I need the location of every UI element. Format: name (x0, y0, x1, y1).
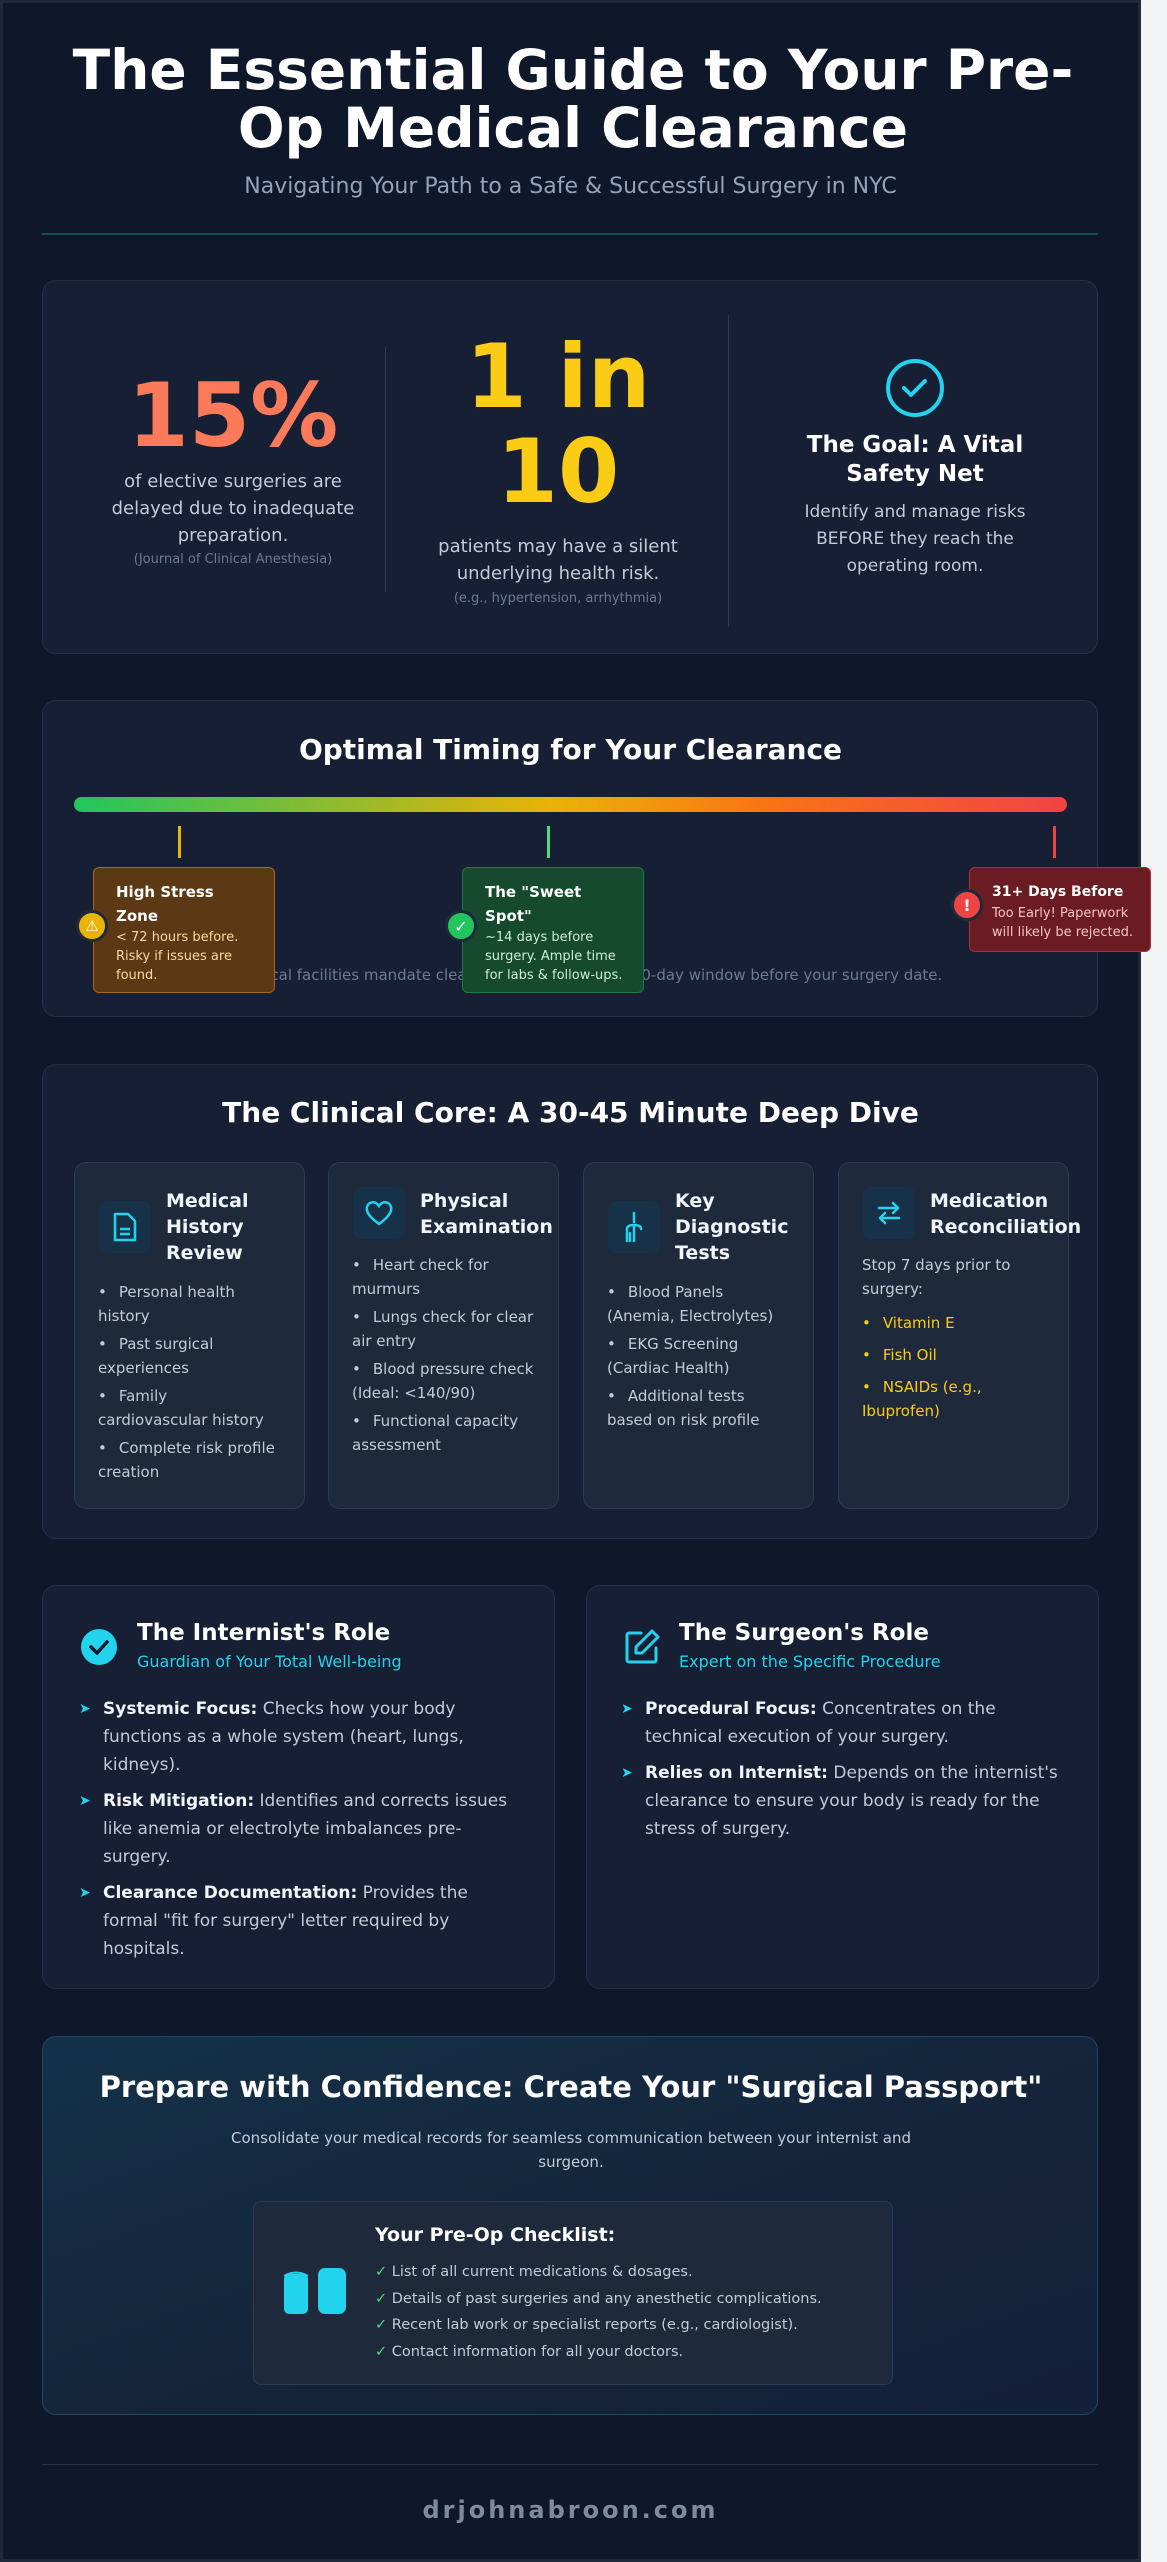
card: medication: surgery: (862, 1280, 923, 1298)
subtitle: Navigating Your Path to a Safe & Successful Surgery in NYC (244, 174, 897, 199)
card: physical exam: Lungs check for clear air entry (352, 1308, 533, 1350)
card: high stress: found. (116, 968, 157, 983)
card: diagnostic tests (583, 1162, 814, 1509)
title: The Essential Guide to Your Pre- (73, 38, 1073, 102)
card: medical history: Personal health history (98, 1283, 235, 1325)
card: physical exam: Physical (420, 1190, 508, 1212)
list: surgeon (622, 1699, 1058, 1839)
card: diagnostic tests: Diagnostic (675, 1216, 788, 1238)
card: too early: 31+ Days Before (992, 884, 1123, 900)
title (72, 38, 1073, 160)
card: sweet spot: ~14 days before (485, 930, 593, 945)
stat: 15%: delayed due to inadequate (112, 498, 354, 519)
card: diagnostic tests: Blood Panels (628, 1283, 723, 1301)
card: medical history: Medical (166, 1190, 249, 1212)
panel: internist role: The Internist's Role (137, 1620, 390, 1646)
goal block: BEFORE they reach the (816, 529, 1014, 549)
checklist box: Your Pre-Op Checklist: (375, 2224, 615, 2246)
icon: warning: ⚠ (85, 917, 99, 935)
panel: surgeon role: Expert on the Specific Procedure (679, 1652, 941, 1671)
checklist box: ✓ List of all current medications & dosages. (375, 2264, 693, 2280)
card: diagnostic tests: Additional tests based on risk profile (607, 1387, 759, 1429)
goal block: Identify and manage risks (804, 502, 1026, 522)
heading: timing: Optimal Timing for Your Clearance (299, 733, 842, 766)
list: surgeon: Relies on Internist: Depends on the internist's clearance to ensure your body is ready for the stress of surgery. (645, 1763, 1058, 1839)
timeline bar (74, 797, 1067, 812)
card: diagnostic tests: EKG Screening (Cardiac Health) (607, 1335, 738, 1377)
panel: internist role: Guardian of Your Total Well-being (137, 1652, 402, 1671)
checklist box: ✓ Recent lab work or specialist reports (e.g., cardiologist). (375, 2317, 798, 2333)
footer: drjohnabroon.com (422, 2496, 718, 2524)
icon: badge check (81, 1629, 117, 1665)
icon: alert (951, 889, 983, 921)
card: physical exam: Examination (420, 1216, 553, 1238)
icon: warning (76, 910, 108, 942)
checklist box: ✓ Details of past surgeries and any anesthetic complications. (375, 2290, 822, 2306)
panel: surgical passport: Prepare with Confidence: Create Your "Surgical Passport" (100, 2070, 1042, 2104)
card: sweet spot: for labs & follow-ups. (485, 968, 622, 983)
card: medication: Reconciliation (930, 1216, 1081, 1238)
card: high stress: < 72 hours before. (116, 930, 238, 945)
card: physical exam: Heart check for murmurs (352, 1256, 489, 1298)
stat: 15% (112, 364, 354, 567)
stat: 1 in 10: 10 (497, 420, 619, 523)
icon: folders (284, 2268, 346, 2314)
checklist box: ✓ Contact information for all your doctors. (375, 2344, 683, 2360)
stat: 1 in 10 (438, 325, 678, 606)
card: medical history: History (166, 1216, 244, 1238)
list: surgeon: Procedural Focus: Concentrates on the technical execution of your surgery. (645, 1699, 996, 1747)
card: high stress (93, 867, 275, 993)
card: too early: will likely be rejected. (992, 925, 1133, 940)
goal block: The Goal: A Vital (807, 432, 1023, 458)
footnote: NYC surgical facilities mandate clearance occurs within a 30-day window before your surgery date. (199, 966, 942, 984)
stat: 15%: of elective surgeries are (124, 471, 342, 492)
title: Op Medical Clearance (238, 96, 908, 160)
goal block: Safety Net (846, 461, 984, 487)
card: medical history: Complete risk profile creation (98, 1439, 275, 1481)
panel: surgeon role (586, 1585, 1099, 1989)
card: diagnostic tests: Tests (675, 1242, 730, 1264)
heading: clinical core: The Clinical Core: A 30-45 Minute Deep Dive (222, 1096, 919, 1129)
card: medication: NSAIDs (e.g., Ibuprofen) (862, 1378, 982, 1420)
card: physical exam: Functional capacity assessment (352, 1412, 518, 1454)
stat: 1 in 10: (e.g., hypertension, arrhythmia) (454, 591, 662, 606)
card: too early: Too Early! Paperwork (992, 906, 1128, 921)
card: sweet spot: surgery. Ample time (485, 949, 616, 964)
panel: clinical core (42, 1064, 1098, 1539)
icon: check circle (886, 359, 944, 417)
panel: timing (42, 700, 1098, 1017)
icon: check: ✓ (454, 916, 468, 936)
card: medication (838, 1162, 1069, 1509)
card: physical exam (328, 1162, 559, 1509)
card: high stress: Zone (116, 907, 158, 925)
card: medical history (74, 1162, 305, 1509)
card: high stress: High Stress (116, 883, 214, 901)
panel: internist role (42, 1585, 555, 1989)
list: internist: Clearance Documentation: Provides the formal "fit for surgery" letter required by hospitals. (103, 1883, 468, 1959)
panel: stats (42, 280, 1098, 654)
card: diagnostic tests: Key (675, 1190, 715, 1212)
icon: check (445, 910, 477, 942)
card: sweet spot: The "Sweet (485, 883, 581, 901)
card: medication: Fish Oil (883, 1346, 937, 1364)
list: internist: Systemic Focus: Checks how your body functions as a whole system (heart, lungs, kidneys). (103, 1699, 464, 1775)
panel: surgical passport: Consolidate your medical records for seamless communication between your internist and surgeon. (231, 2129, 911, 2171)
card: sweet spot: Spot" (485, 907, 532, 925)
stat: 15%: 15% (128, 364, 338, 467)
panel: surgical passport (42, 2036, 1098, 2415)
card: diagnostic tests: (Anemia, Electrolytes) (607, 1307, 773, 1325)
stat: 1 in 10: underlying health risk. (457, 563, 659, 584)
panel: surgeon role: The Surgeon's Role (679, 1620, 929, 1646)
card: medication: Vitamin E (883, 1314, 955, 1332)
card: medical history: Review (166, 1242, 243, 1264)
goal block: operating room. (847, 556, 983, 576)
card: medical history: Family cardiovascular history (98, 1387, 264, 1429)
stat: 1 in 10: 1 in (466, 325, 650, 428)
card: too early (969, 867, 1151, 952)
icon: alert: ! (963, 896, 971, 914)
list: internist: Risk Mitigation: Identifies and corrects issues like anemia or electrolyte imbalances pre-surgery. (103, 1791, 507, 1867)
checklist box (253, 2201, 893, 2385)
icon: edit (626, 1629, 660, 1664)
card: high stress: Risky if issues are (116, 949, 232, 964)
card: medication: Medication (930, 1190, 1048, 1212)
card: medication: Stop 7 days prior to (862, 1256, 1010, 1274)
goal block (804, 359, 1026, 576)
card: physical exam: Blood pressure check (Ideal: <140/90) (352, 1360, 533, 1402)
stat: 15%: preparation. (178, 525, 288, 546)
list: internist (80, 1699, 507, 1959)
stat: 1 in 10: patients may have a silent (438, 536, 678, 557)
card: sweet spot (462, 867, 644, 993)
stat: 15%: (Journal of Clinical Anesthesia) (134, 552, 332, 567)
card: medical history: Past surgical experiences (98, 1335, 213, 1377)
